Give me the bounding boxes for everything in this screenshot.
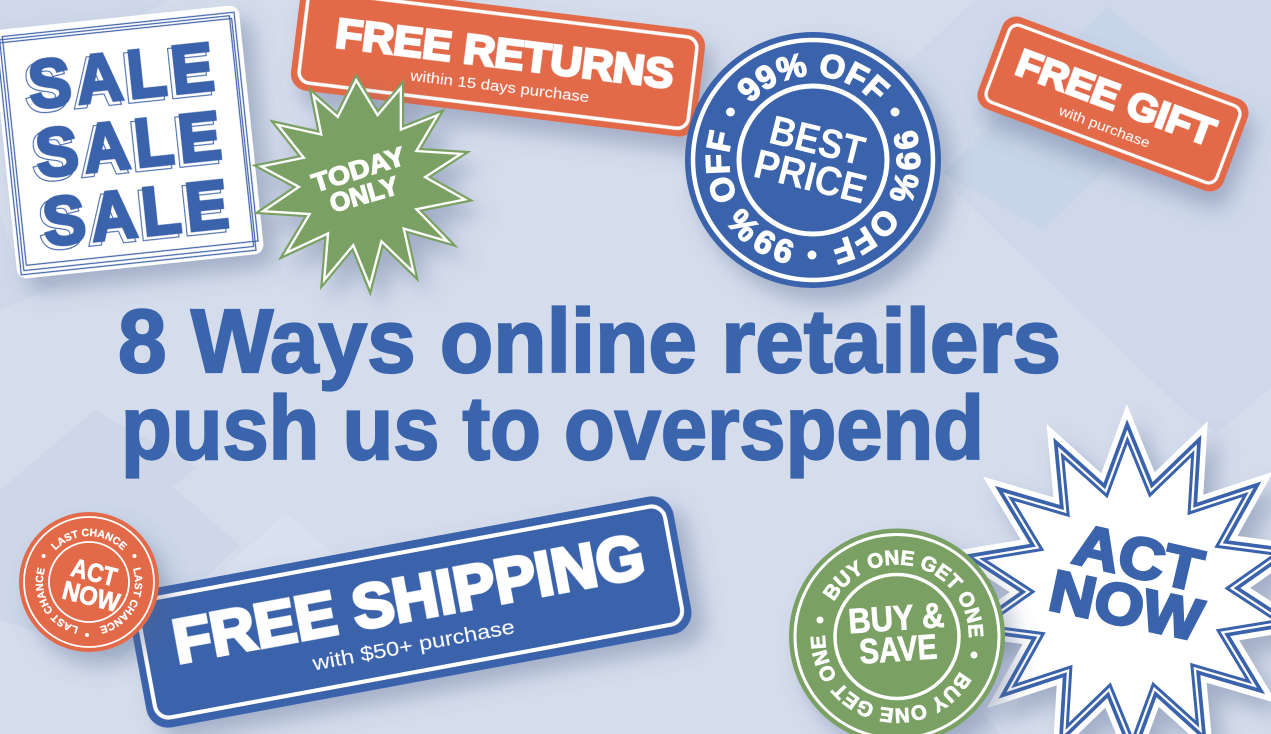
text: now: NOW [59, 575, 123, 618]
sale line 3: SALE [35, 169, 228, 265]
text: save: SAVE [858, 627, 938, 672]
badge: act now starburst [983, 440, 1271, 734]
subtext: within 15 days purchase: within 15 days purchase [408, 67, 590, 106]
sale line 2: SALE [32, 97, 225, 193]
ring text: last chance: LAST CHANCE [100, 567, 142, 634]
text: only: ONLY [326, 170, 402, 218]
title: 8 Ways online retailers [118, 292, 1061, 392]
title: push us to overspend [121, 379, 984, 479]
sale line 2: SALE [28, 101, 221, 197]
sale line 1: SALE [25, 29, 218, 124]
badge: sale sale sale [0, 5, 264, 279]
text: price: PRICE [750, 140, 871, 213]
title [118, 292, 1061, 479]
subtext: with purchase: with purchase [1056, 103, 1152, 151]
ring text: 99% off [705, 53, 921, 265]
sale line 3: SALE [39, 166, 232, 262]
text: now: NOW [1044, 558, 1208, 654]
ring text: buy one get one: BUY ONE GET ONE [810, 635, 972, 724]
badge: free returns [289, 0, 707, 138]
ring text: 99% off: 99% OFF [834, 130, 921, 265]
heading: free returns: FREE RETURNS [333, 9, 676, 97]
badge: buy and save seal [789, 528, 1028, 734]
text: act: ACT [1068, 512, 1209, 604]
text: buy and: BUY & [847, 596, 945, 641]
ring text: buy one get one: BUY ONE GET ONE [822, 550, 984, 638]
ring text: last chance: LAST CHANCE [36, 567, 78, 634]
text: act: ACT [68, 552, 120, 592]
subtext: with $50+ purchase: with $50+ purchase [310, 616, 517, 676]
heading: free shipping: FREE SHIPPING [167, 522, 650, 677]
sale line 1: SALE [21, 32, 214, 128]
ring text: 99% off: 99% OFF [738, 53, 891, 101]
ring text: last chance: LAST CHANCE [50, 528, 128, 550]
badge: last chance act now seal [19, 512, 181, 676]
sale line 3: SALE [35, 169, 228, 265]
ring text: buy one get one [810, 550, 984, 724]
sale line 2: SALE [28, 101, 221, 197]
badge: free gift [973, 12, 1253, 196]
badge: best price seal [685, 32, 962, 312]
ring text: 99% off: 99% OFF [705, 130, 794, 264]
heading: free gift: FREE GIFT [1010, 42, 1221, 155]
text: best: BEST [765, 106, 870, 174]
ring text: last chance [36, 528, 142, 634]
badge: free shipping [125, 493, 695, 731]
badge: today only starburst [261, 80, 465, 286]
text: today: TODAY [308, 141, 409, 198]
sale line 1: SALE [21, 32, 214, 128]
